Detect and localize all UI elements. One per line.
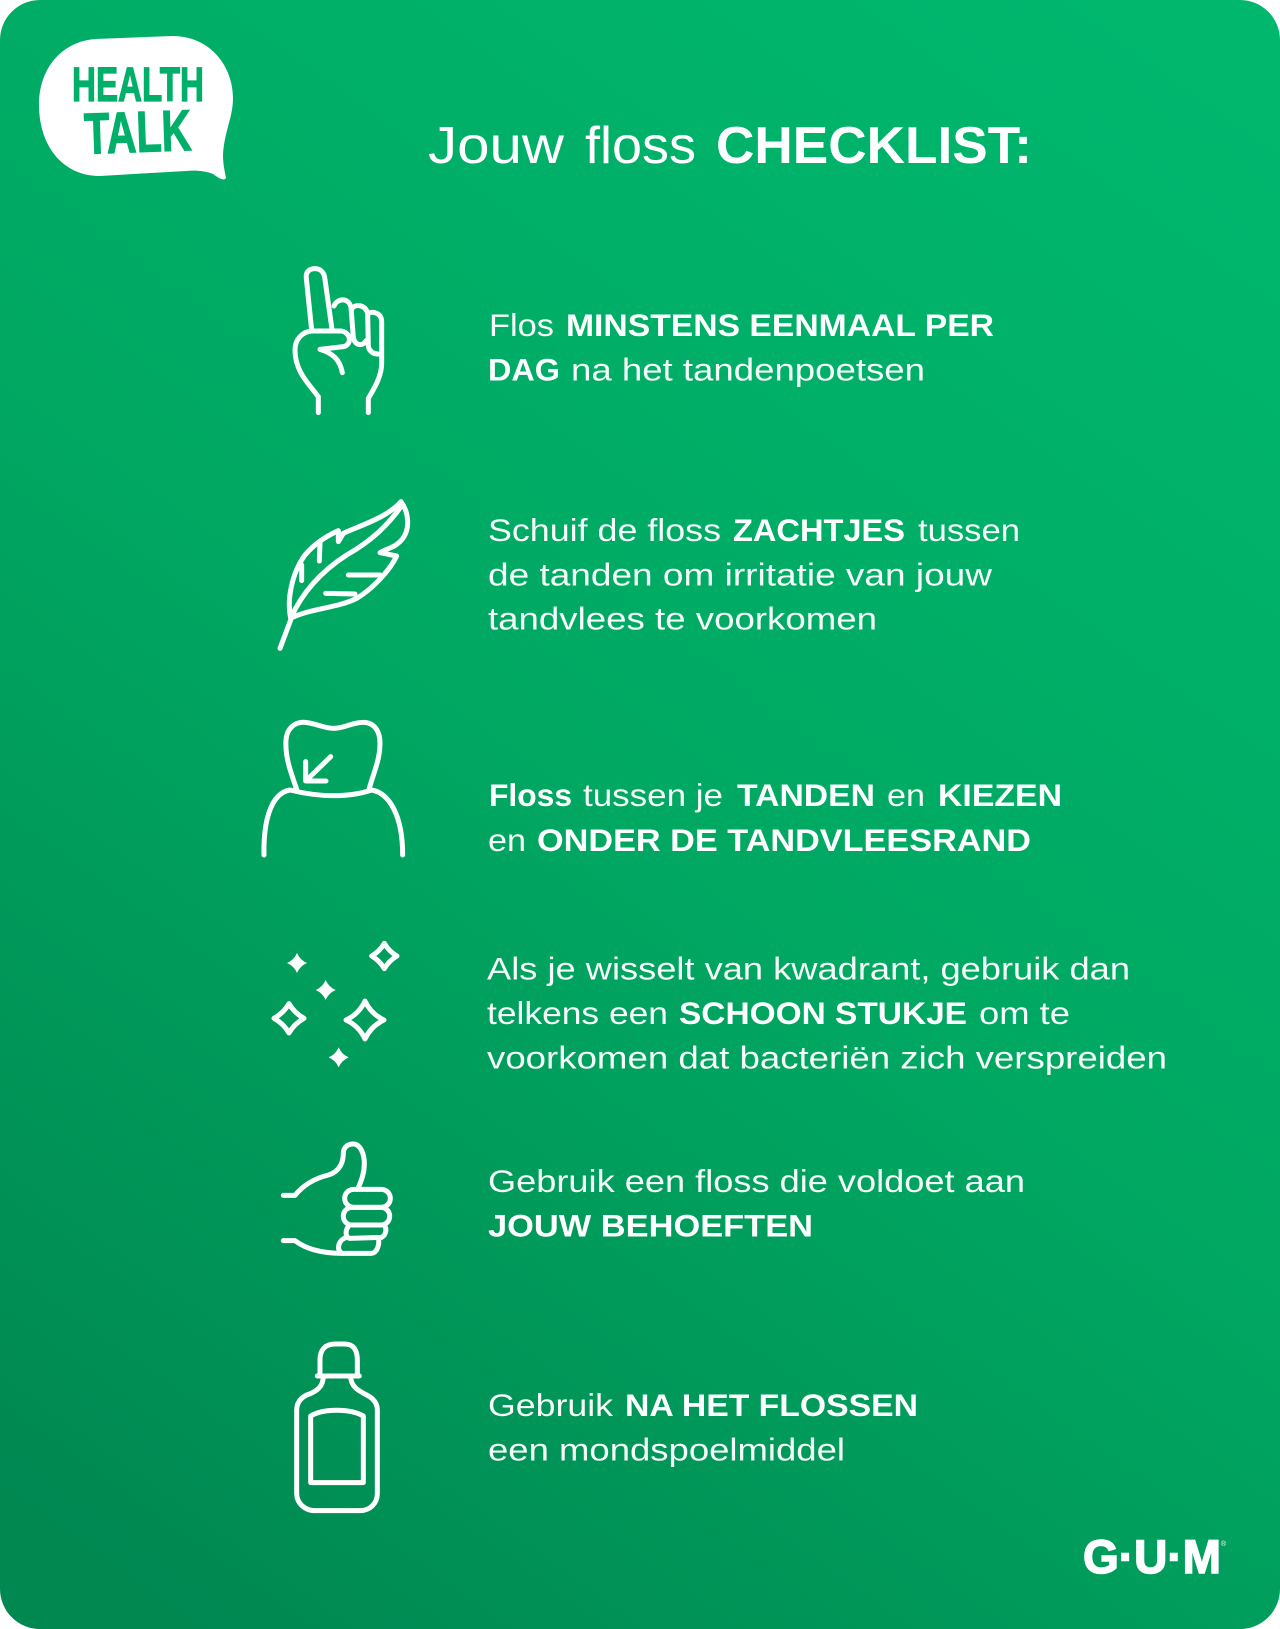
icon: mouthwash bottle	[297, 1344, 377, 1511]
text: step 3: TANDEN	[737, 777, 875, 813]
logo: Health Talk speech bubble: TALK	[83, 98, 192, 167]
text: step 4: telkens een	[487, 995, 668, 1031]
text: step 3: KIEZEN	[938, 777, 1062, 813]
text: step 4: voorkomen dat bacteriën zich verspreiden	[487, 1040, 1167, 1076]
icon: raised finger hand	[295, 269, 382, 413]
text: step 6: een mondspoelmiddel	[488, 1432, 845, 1468]
icon: sparkles	[274, 943, 397, 1067]
text: step 5	[488, 1163, 1025, 1244]
logo: GUM: ®	[1221, 1540, 1227, 1548]
text: step 4: SCHOON STUKJE	[679, 995, 967, 1031]
text: step 3: en	[887, 777, 925, 813]
text: step 4: om te	[979, 995, 1070, 1031]
icon: thumbs up	[283, 1144, 390, 1253]
text: step 2: ZACHTJES	[733, 512, 905, 548]
title: CHECKLIST:	[716, 117, 1032, 175]
text: step 2: tussen	[918, 512, 1020, 548]
text: step 3: tussen je	[583, 777, 723, 813]
logo: Health Talk speech bubble: HEALTH	[72, 59, 204, 112]
text: step 6: NA HET FLOSSEN	[625, 1387, 918, 1423]
text: step 2: tandvlees te voorkomen	[488, 600, 877, 636]
text: step 1	[488, 307, 994, 388]
icon: feather	[280, 502, 408, 648]
text: step 3: Floss	[489, 777, 572, 813]
icon: tooth with arrow	[264, 722, 403, 855]
text: step 3	[488, 777, 1062, 858]
title	[428, 117, 1032, 175]
logo: GUM: G·U·M	[1083, 1530, 1221, 1583]
title: Jouw	[428, 117, 564, 175]
title: floss	[585, 117, 696, 175]
logo: Health Talk speech bubble	[39, 36, 233, 179]
text: step 4	[487, 950, 1167, 1076]
text: step 2: Schuif de floss	[488, 512, 721, 548]
text: step 6	[488, 1387, 918, 1468]
text: step 5: Gebruik een floss die voldoet aan	[488, 1163, 1025, 1199]
text: step 6: Gebruik	[488, 1387, 613, 1423]
text: step 3: en	[488, 822, 526, 858]
text: step 1: MINSTENS EENMAAL PER	[566, 307, 994, 343]
text: step 2: de tanden om irritatie van jouw	[488, 556, 992, 592]
text: step 1: na het tandenpoetsen	[571, 352, 925, 388]
text: step 5: JOUW BEHOEFTEN	[488, 1208, 813, 1244]
text: step 3: ONDER DE TANDVLEESRAND	[537, 822, 1031, 858]
text: step 1: Flos	[489, 307, 554, 343]
text: step 1: DAG	[488, 352, 560, 388]
text: step 4: Als je wisselt van kwadrant, gebruik dan	[487, 950, 1130, 986]
text: step 2	[488, 512, 1020, 636]
